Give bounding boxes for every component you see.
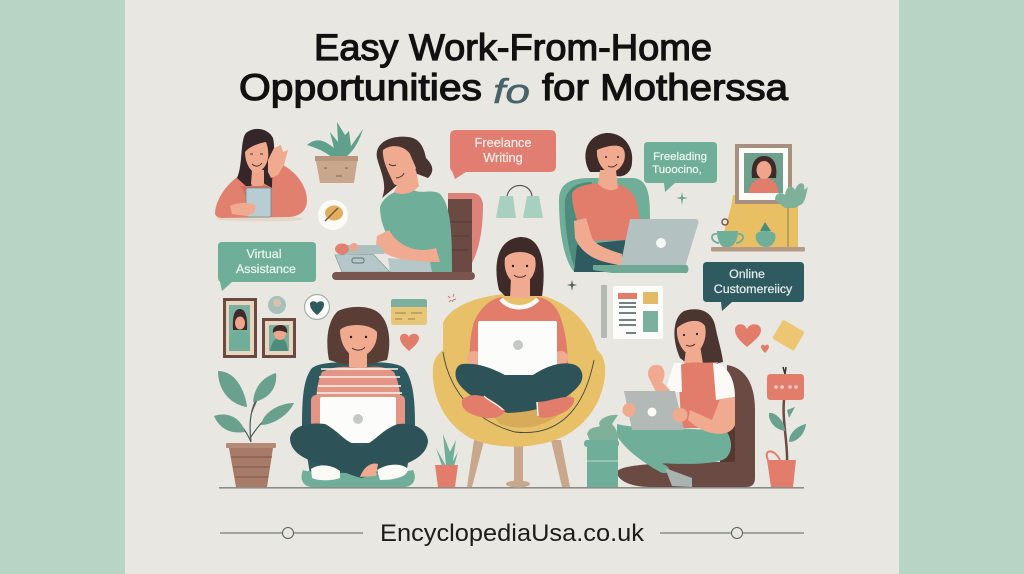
- speech bubble: virtual assistance: Virtual: [247, 247, 281, 261]
- speech bubble: freelading tuoocino: Freelading: [653, 151, 707, 163]
- title: for Motherssa: [542, 67, 788, 108]
- framed family photos: [223, 298, 296, 358]
- speech bubble: online customereiicy: Online: [729, 267, 765, 281]
- footer rule, left: [220, 528, 363, 538]
- woman with laptop, top right: [559, 133, 698, 273]
- document with charts: [613, 286, 663, 339]
- icon: heart in ring: [304, 294, 330, 320]
- icon: round feather badge: [318, 200, 348, 230]
- small potted plant: [435, 434, 458, 487]
- speech bubble: online customereiicy: [703, 262, 804, 311]
- icon: sparkle: [676, 192, 688, 205]
- speech bubble: freelading tuoocino: Tuoocino,: [652, 164, 702, 176]
- woman at desk with tablet: [332, 137, 483, 280]
- icon: heart: [400, 334, 419, 351]
- icon: sparkle: [567, 280, 577, 291]
- icon: sparkle burst: [448, 294, 456, 302]
- woman with tablet on brown floor seat: [617, 309, 755, 487]
- icon: heart: [735, 324, 761, 347]
- speech bubble: freelance writing: Writing: [483, 150, 523, 165]
- speech bubble: freelance writing: [450, 130, 556, 179]
- icon: small round portrait: [268, 296, 286, 314]
- title: fo: [493, 73, 530, 111]
- icon: card: [391, 299, 427, 325]
- woman in yellow round chair: [433, 237, 605, 488]
- icon: ruler: [601, 285, 607, 338]
- title: Opportunities: [239, 67, 482, 108]
- icon: small heart: [761, 345, 769, 353]
- footer rule, right: [660, 528, 804, 538]
- footer website text: EncyclopediaUsa.co.uk: [380, 520, 645, 547]
- large potted plant: [214, 371, 294, 487]
- coral sign with plant and pot: [767, 367, 806, 487]
- speech bubble: freelading tuoocino: [644, 142, 717, 192]
- woman with tablet, top left: [215, 129, 307, 222]
- teal planter: [584, 415, 619, 487]
- title: Easy Work-From-Home: [314, 27, 712, 68]
- floor line: [219, 487, 804, 489]
- potted plant, top: [307, 122, 363, 183]
- shelf with framed portrait and plants: [711, 144, 808, 252]
- speech bubble: online customereiicy: Customereiicy: [714, 282, 793, 296]
- icon: desk lamps: [496, 186, 543, 218]
- right side band: [899, 0, 1024, 574]
- woman sitting cross-legged with laptop: [290, 307, 428, 487]
- speech bubble: freelance writing: Freelance: [475, 135, 531, 150]
- icon: cracker: [772, 319, 805, 351]
- speech bubble: virtual assistance: Assistance: [236, 262, 296, 276]
- speech bubble: virtual assistance: [218, 242, 316, 291]
- left side band: [0, 0, 125, 574]
- title: [239, 27, 788, 111]
